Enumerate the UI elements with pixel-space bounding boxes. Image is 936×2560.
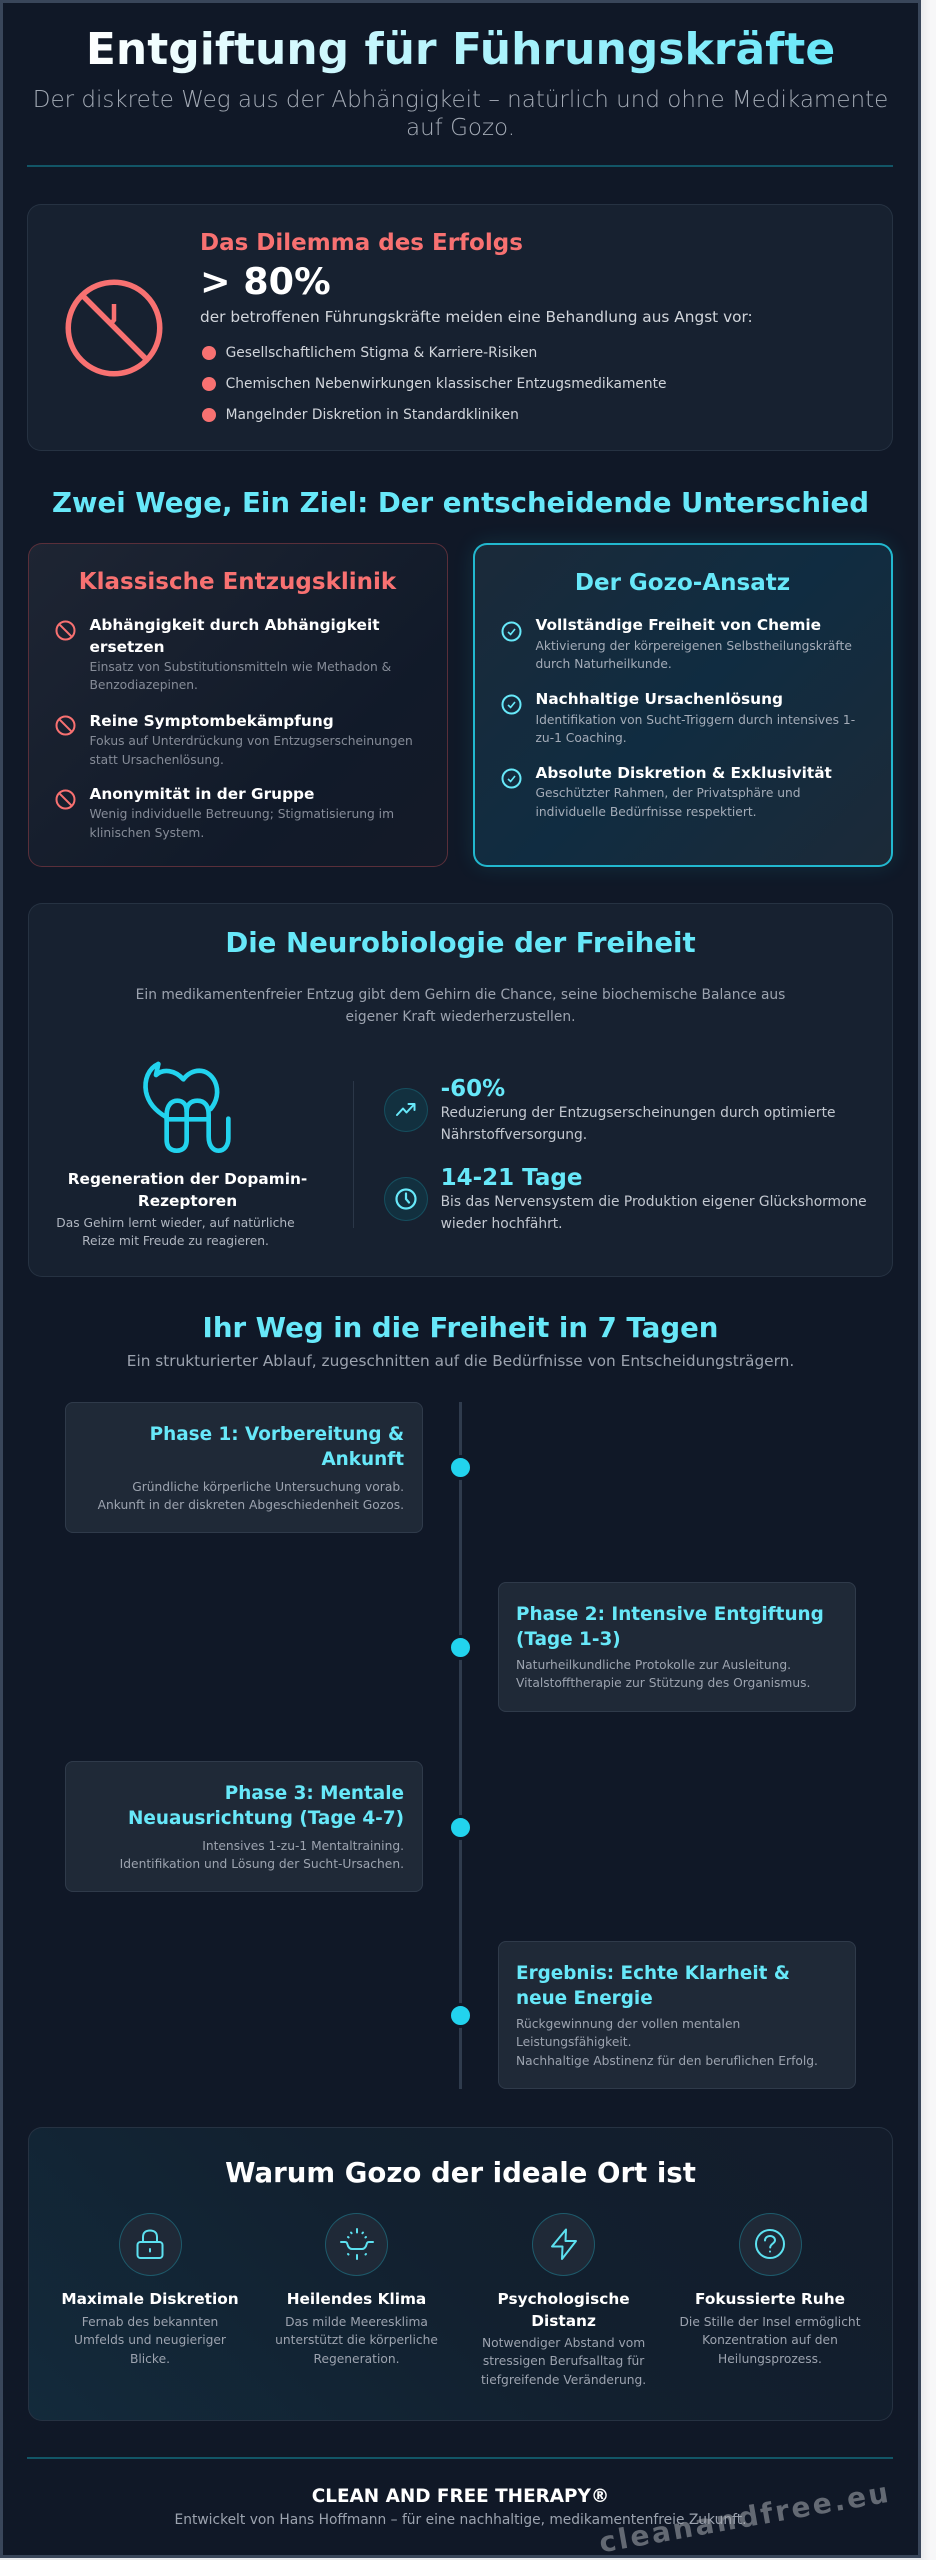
card: phase 3	[64, 1761, 423, 1892]
item: discretion: Geschützter Rahmen, der Privatsphäre und	[536, 786, 801, 800]
timeline	[65, 1402, 856, 2089]
panel: neurobiology	[28, 903, 893, 1277]
card: phase 2: Naturheilkundliche Protokolle zur Ausleitung.	[516, 1658, 791, 1672]
subtitle: Der diskrete Weg aus der Abhängigkeit – natürlich und ohne Medikamente	[33, 87, 888, 113]
icon: check	[502, 622, 522, 642]
label: dopamine receptors	[68, 1170, 307, 1210]
card: phase 3: Phase 3: Mentale	[225, 1782, 404, 1804]
heading: classic clinic: Klassische Entzugsklinik	[79, 569, 396, 595]
panel: Gozo approach	[473, 543, 893, 867]
icon: trend up	[384, 1088, 428, 1132]
column: distance: tiefgreifende Veränderung.	[481, 2373, 646, 2387]
statistic: 80 percent: > 80%	[200, 260, 331, 303]
card: phase 2	[498, 1582, 856, 1712]
card: phase 1: Ankunft	[321, 1448, 404, 1470]
text: neurobiology intro: eigener Kraft wiederherzustellen.	[346, 1009, 576, 1025]
card: phase 2: Vitalstofftherapie zur Stützung des Organismus.	[516, 1676, 810, 1690]
heading: neurobiology: Die Neurobiologie der Freiheit	[225, 926, 696, 959]
card: phase 1	[64, 1402, 423, 1533]
text: dopamine description: Das Gehirn lernt wieder, auf natürliche	[56, 1216, 295, 1230]
text: minus 60 percent description: Reduzierung der Entzugserscheinungen durch optimierte	[441, 1105, 836, 1121]
card: result: Nachhaltige Abstinenz für den beruflichen Erfolg.	[516, 2054, 818, 2068]
icon: brain	[143, 1062, 231, 1153]
column: calm: Konzentration auf den	[702, 2333, 838, 2347]
column: distance: Distanz	[531, 2312, 596, 2330]
text: neurobiology intro: Ein medikamentenfreier Entzug gibt dem Gehirn die Chance, seine biochemische Balance aus	[136, 987, 785, 1003]
item: anonymity	[90, 785, 394, 840]
subtitle: auf Gozo.	[406, 115, 515, 141]
item: dependency: Einsatz von Substitutionsmitteln wie Methadon &	[90, 660, 391, 674]
column: climate	[275, 2213, 438, 2366]
icon: check	[502, 768, 522, 788]
text: minus 60 percent description: Nährstoffversorgung.	[441, 1127, 587, 1143]
item: root cause: zu-1 Coaching.	[536, 731, 627, 745]
text: neurobiology intro	[136, 987, 785, 1025]
panel: why Gozo	[28, 2127, 893, 2421]
watermark: cleanandfree.eu	[597, 2476, 893, 2559]
item: freedom from chemistry: Aktivierung der körpereigenen Selbstheilungskräfte	[536, 638, 852, 652]
card: result: Ergebnis: Echte Klarheit &	[516, 1962, 790, 1984]
text: 14 to 21 days description	[441, 1194, 867, 1232]
item: symptoms	[90, 712, 413, 766]
text: timeline intro: Ein strukturierter Ablauf, zugeschnitten auf die Bedürfnisse von Entscheidungsträgern.	[127, 1352, 794, 1370]
card: result: Rückgewinnung der vollen mentalen	[516, 2017, 740, 2031]
column: climate: Heilendes Klima	[287, 2290, 426, 2308]
footer text: Entwickelt von Hans Hoffmann – für eine nachhaltige, medikamentenfreie Zukunft.	[174, 2512, 746, 2528]
marker: result	[448, 2002, 472, 2028]
marker: phase 2	[448, 1634, 472, 1660]
card: phase 3: Identifikation und Lösung der Sucht-Ursachen.	[120, 1857, 404, 1871]
footer title: CLEAN AND FREE THERAPY®	[312, 2486, 609, 2507]
icon: lock	[118, 2212, 182, 2276]
item: freedom from chemistry	[536, 616, 852, 671]
item: anonymity: klinischen System.	[90, 826, 204, 840]
item: symptoms: Fokus auf Unterdrückung von Entzugserscheinungen	[90, 734, 413, 748]
text: dopamine description	[56, 1216, 295, 1248]
column: climate: Regeneration.	[313, 2352, 400, 2366]
card: result: Leistungsfähigkeit.	[516, 2035, 631, 2049]
column: discretion: Blicke.	[130, 2352, 170, 2366]
column: distance: stressigen Berufsalltag für	[483, 2354, 644, 2368]
item: dependency: ersetzen	[90, 638, 165, 656]
item: freedom from chemistry: durch Naturheilkunde.	[536, 657, 672, 671]
card: phase 3: Neuausrichtung (Tage 4-7)	[128, 1808, 404, 1828]
column: calm: Heilungsprozess.	[718, 2352, 822, 2366]
item: root cause	[536, 690, 855, 745]
column: climate: Das milde Meeresklima	[285, 2315, 428, 2329]
icon: ban	[56, 620, 76, 640]
panel: dilemma	[27, 204, 893, 451]
stat: 14 to 21 days: 14-21 Tage	[441, 1165, 582, 1191]
icon: ban	[56, 716, 76, 736]
text: dopamine description: Reize mit Freude zu reagieren.	[82, 1234, 269, 1248]
icon: question circle	[738, 2212, 802, 2276]
column: discretion	[61, 2213, 239, 2366]
icon: clock	[384, 1177, 428, 1221]
item: root cause: Identifikation von Sucht-Triggern durch intensives 1-	[536, 712, 855, 726]
column: calm	[680, 2213, 860, 2366]
card: phase 1: Phase 1: Vorbereitung &	[150, 1424, 404, 1444]
text: 14 to 21 days description: Bis das Nervensystem die Produktion eigener Glückshormone	[441, 1194, 867, 1210]
column: calm: Die Stille der Insel ermöglicht	[680, 2315, 860, 2329]
heading: timeline: Ihr Weg in die Freiheit in 7 Tagen	[203, 1311, 718, 1344]
column: discretion: Fernab des bekannten	[82, 2315, 218, 2329]
heading: Gozo approach: Der Gozo-Ansatz	[575, 570, 790, 596]
item: freedom from chemistry: Vollständige Freiheit von Chemie	[536, 616, 821, 634]
list: fears: Mangelnder Diskretion in Standardkliniken	[226, 407, 519, 423]
title: Entgiftung für Führungskräfte	[86, 24, 835, 75]
item: discretion: individuelle Bedürfnisse respektiert.	[536, 804, 757, 818]
text: statistic description: der betroffenen Führungskräfte meiden eine Behandlung aus Angst vor:	[200, 308, 753, 326]
list: fears: Chemischen Nebenwirkungen klassischer Entzugsmedikamente	[226, 376, 667, 392]
item: dependency: Abhängigkeit durch Abhängigkeit	[90, 616, 380, 634]
column: calm: Fokussierte Ruhe	[695, 2290, 845, 2308]
item: dependency	[90, 616, 391, 692]
text: minus 60 percent description	[441, 1105, 836, 1143]
heading: two ways: Zwei Wege, Ein Ziel: Der entscheidende Unterschied	[52, 486, 869, 519]
column: distance: Notwendiger Abstand vom	[482, 2336, 645, 2350]
marker: phase 1	[448, 1454, 472, 1480]
text: 14 to 21 days description: wieder hochfährt.	[441, 1216, 563, 1232]
card: phase 2: Phase 2: Intensive Entgiftung	[516, 1604, 824, 1624]
label: dopamine receptors: Regeneration der Dopamin-	[68, 1170, 307, 1188]
item: anonymity: Wenig individuelle Betreuung; Stigmatisierung im	[90, 807, 394, 821]
panel: classic clinic	[28, 543, 448, 867]
item: discretion: Absolute Diskretion & Exklusivität	[536, 764, 832, 782]
item: dependency: Benzodiazepinen.	[90, 678, 198, 692]
column: distance	[481, 2213, 646, 2387]
item: anonymity: Anonymität in der Gruppe	[90, 785, 314, 803]
item: discretion	[536, 764, 832, 818]
icon: lightning bolt	[532, 2212, 595, 2276]
card: phase 1: Ankunft in der diskreten Abgeschiedenheit Gozos.	[98, 1498, 404, 1512]
marker: phase 3	[448, 1814, 472, 1840]
column: discretion: Umfelds und neugieriger	[74, 2333, 226, 2347]
list: fears	[202, 345, 667, 423]
card: phase 3: Intensives 1-zu-1 Mentaltraining.	[202, 1838, 404, 1852]
column: distance: Psychologische	[498, 2290, 630, 2308]
icon: healing bath	[325, 2212, 388, 2276]
column: discretion: Maximale Diskretion	[61, 2290, 239, 2308]
card: phase 1: Gründliche körperliche Untersuchung vorab.	[132, 1480, 404, 1494]
card: result	[498, 1941, 856, 2089]
list: fears: Gesellschaftlichem Stigma & Karriere-Risiken	[226, 345, 537, 361]
icon: ban	[56, 790, 76, 810]
subtitle	[33, 87, 888, 141]
item: symptoms: statt Ursachenlösung.	[90, 752, 224, 766]
card: phase 2: (Tage 1-3)	[516, 1628, 621, 1650]
heading: why Gozo: Warum Gozo der ideale Ort ist	[225, 2156, 696, 2189]
label: dopamine receptors: Rezeptoren	[138, 1192, 237, 1210]
item: symptoms: Reine Symptombekämpfung	[90, 712, 334, 730]
heading: dilemma: Das Dilemma des Erfolgs	[200, 230, 523, 256]
icon: check	[502, 694, 522, 714]
stat: minus 60 percent: -60%	[441, 1076, 505, 1102]
item: root cause: Nachhaltige Ursachenlösung	[536, 690, 783, 708]
column: climate: unterstützt die körperliche	[275, 2333, 438, 2347]
icon: prohibited	[66, 280, 162, 376]
card: result: neue Energie	[516, 1988, 653, 2008]
